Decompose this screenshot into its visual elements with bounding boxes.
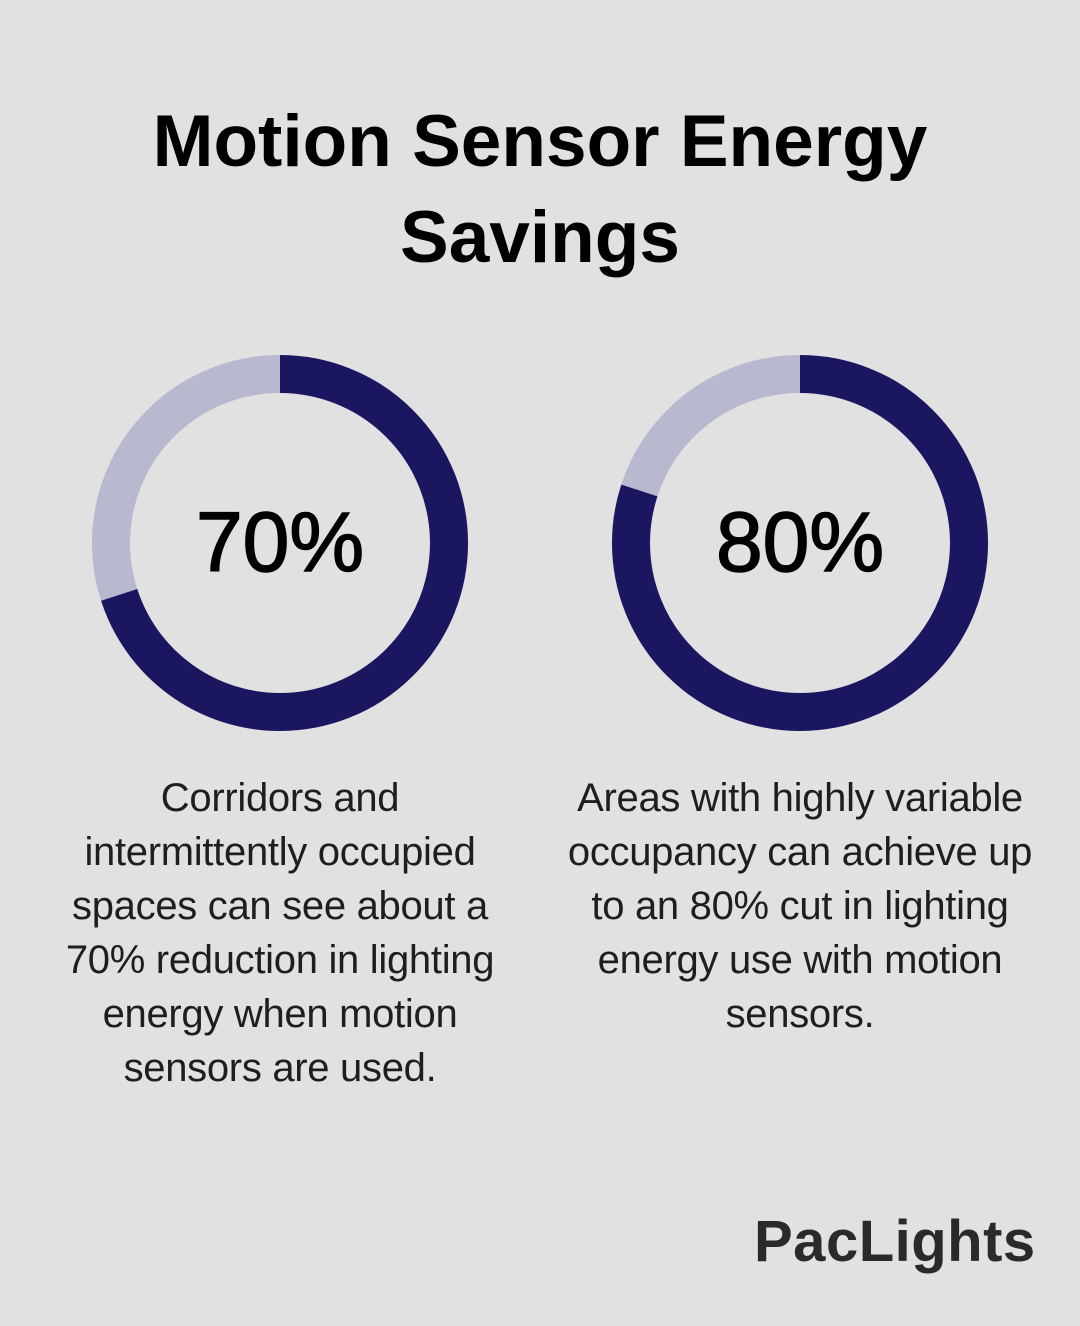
- text: 70% description: sensors are used.: [124, 1046, 436, 1090]
- text: 70% description: spaces can see about a: [72, 884, 488, 928]
- donut: 80%: 80%: [716, 495, 884, 589]
- text: 70% description: Corridors and: [161, 776, 399, 820]
- text: 70% description: intermittently occupied: [84, 830, 476, 874]
- text: 70% description: [66, 776, 494, 1090]
- text: 70% description: energy when motion: [103, 992, 457, 1036]
- text: 80% description: sensors.: [726, 992, 874, 1036]
- text: 80% description: [568, 776, 1032, 1036]
- text: 70% description: 70% reduction in lighting: [66, 938, 494, 982]
- donut: 70%: 70%: [196, 495, 364, 589]
- text: 80% description: to an 80% cut in lighting: [591, 884, 1009, 928]
- text: 80% description: energy use with motion: [598, 938, 1002, 982]
- text: 80% description: Areas with highly variable: [577, 776, 1023, 820]
- donut: 70%: [92, 355, 468, 731]
- title: Motion Sensor Energy: [153, 101, 927, 182]
- text: 80% description: occupancy can achieve up: [568, 830, 1032, 874]
- title: Savings: [400, 197, 680, 278]
- title: [153, 101, 927, 278]
- donut: 80%: [612, 355, 988, 731]
- logo: PacLights: [754, 1209, 1036, 1274]
